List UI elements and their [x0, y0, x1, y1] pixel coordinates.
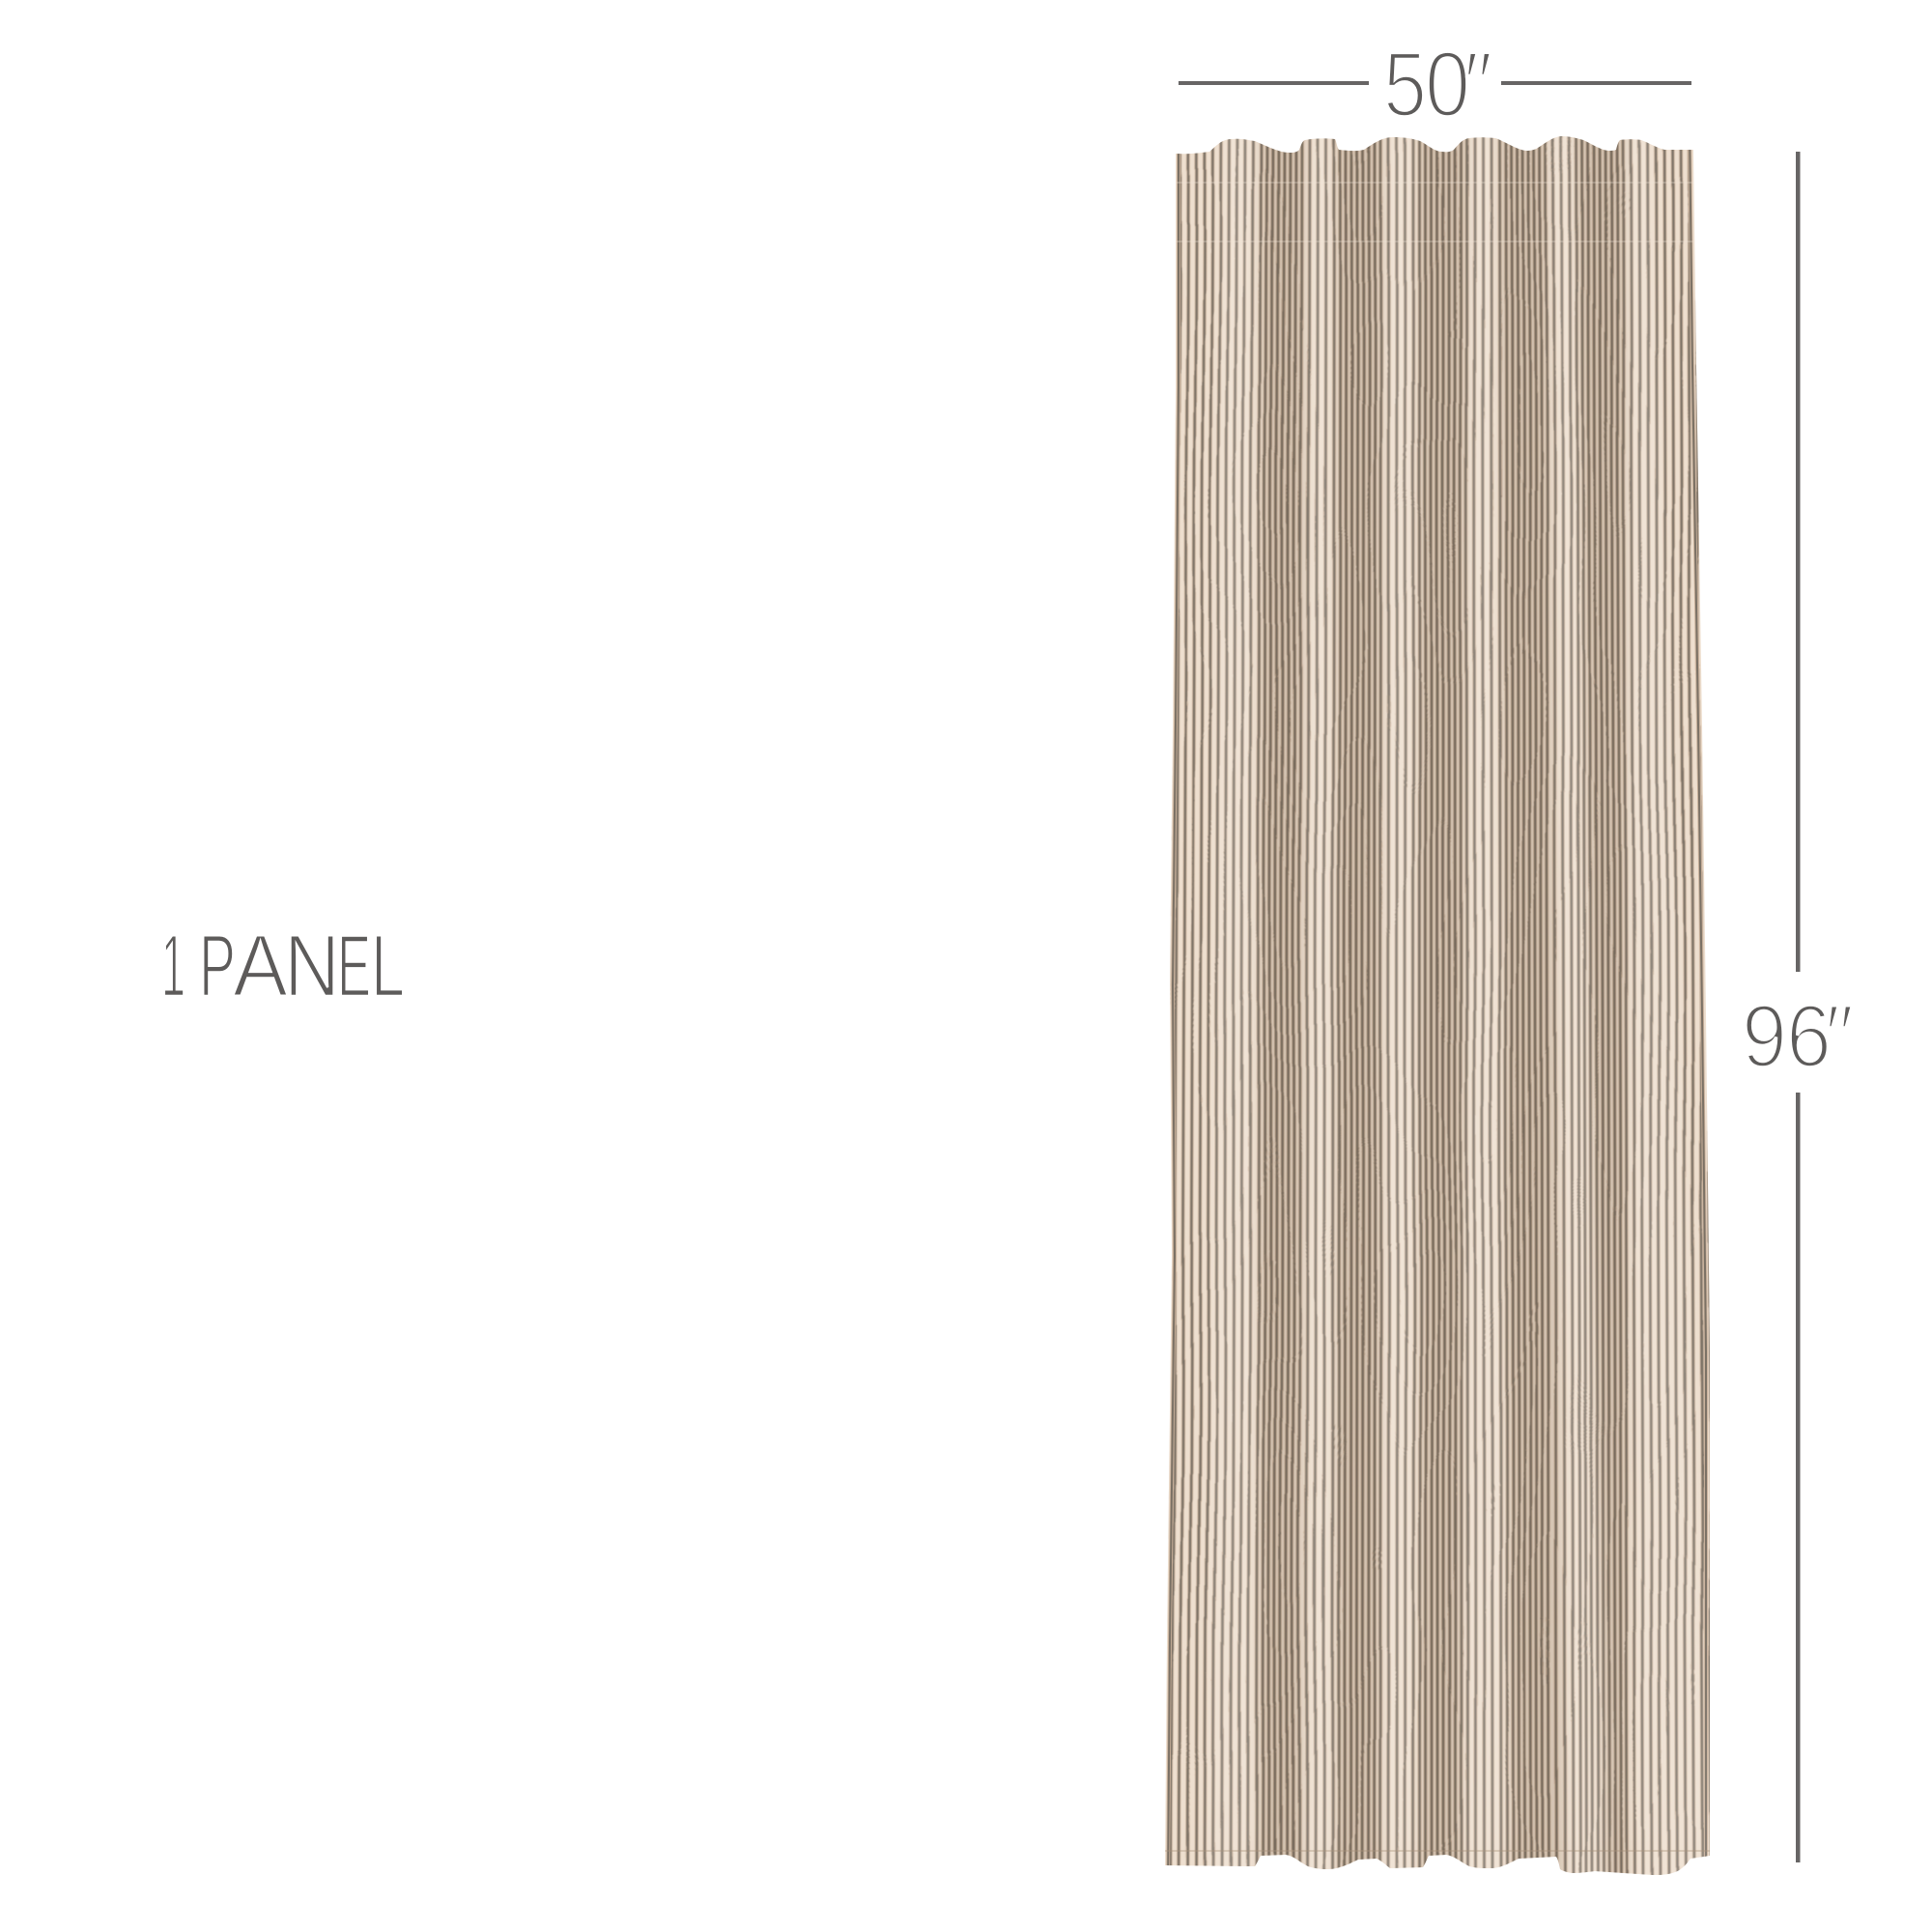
- curtain panel: [1150, 126, 1737, 1893]
- width label: ″: [1463, 33, 1492, 136]
- rod pocket seams: [1165, 183, 1716, 1851]
- panel count label: 1: [161, 918, 185, 1015]
- pleat shadows: [1259, 126, 1627, 1893]
- width label: 0: [1425, 33, 1470, 136]
- width label: 5: [1383, 33, 1427, 136]
- panel count label: E: [337, 918, 371, 1015]
- width dimension: 50 inches: [1179, 33, 1691, 136]
- height label: ″: [1825, 987, 1854, 1086]
- width line: left segment: [1179, 81, 1369, 85]
- ticking stripes: [1155, 126, 1737, 1893]
- panel count label: P: [199, 918, 236, 1015]
- height dimension: 96 inches: [1742, 152, 1854, 1862]
- edge stripes: [1168, 126, 1706, 1893]
- height line: bottom segment: [1796, 1093, 1801, 1862]
- height line: top segment: [1796, 152, 1801, 972]
- panel count label: N: [284, 918, 340, 1015]
- width line: right segment: [1501, 81, 1691, 85]
- panel count label: A: [233, 918, 288, 1015]
- height label: 9: [1742, 987, 1787, 1086]
- panel count label: L: [371, 918, 405, 1015]
- height label: 6: [1786, 987, 1832, 1086]
- fabric base colour: [1150, 126, 1729, 1893]
- pleat highlights: [1208, 126, 1710, 1893]
